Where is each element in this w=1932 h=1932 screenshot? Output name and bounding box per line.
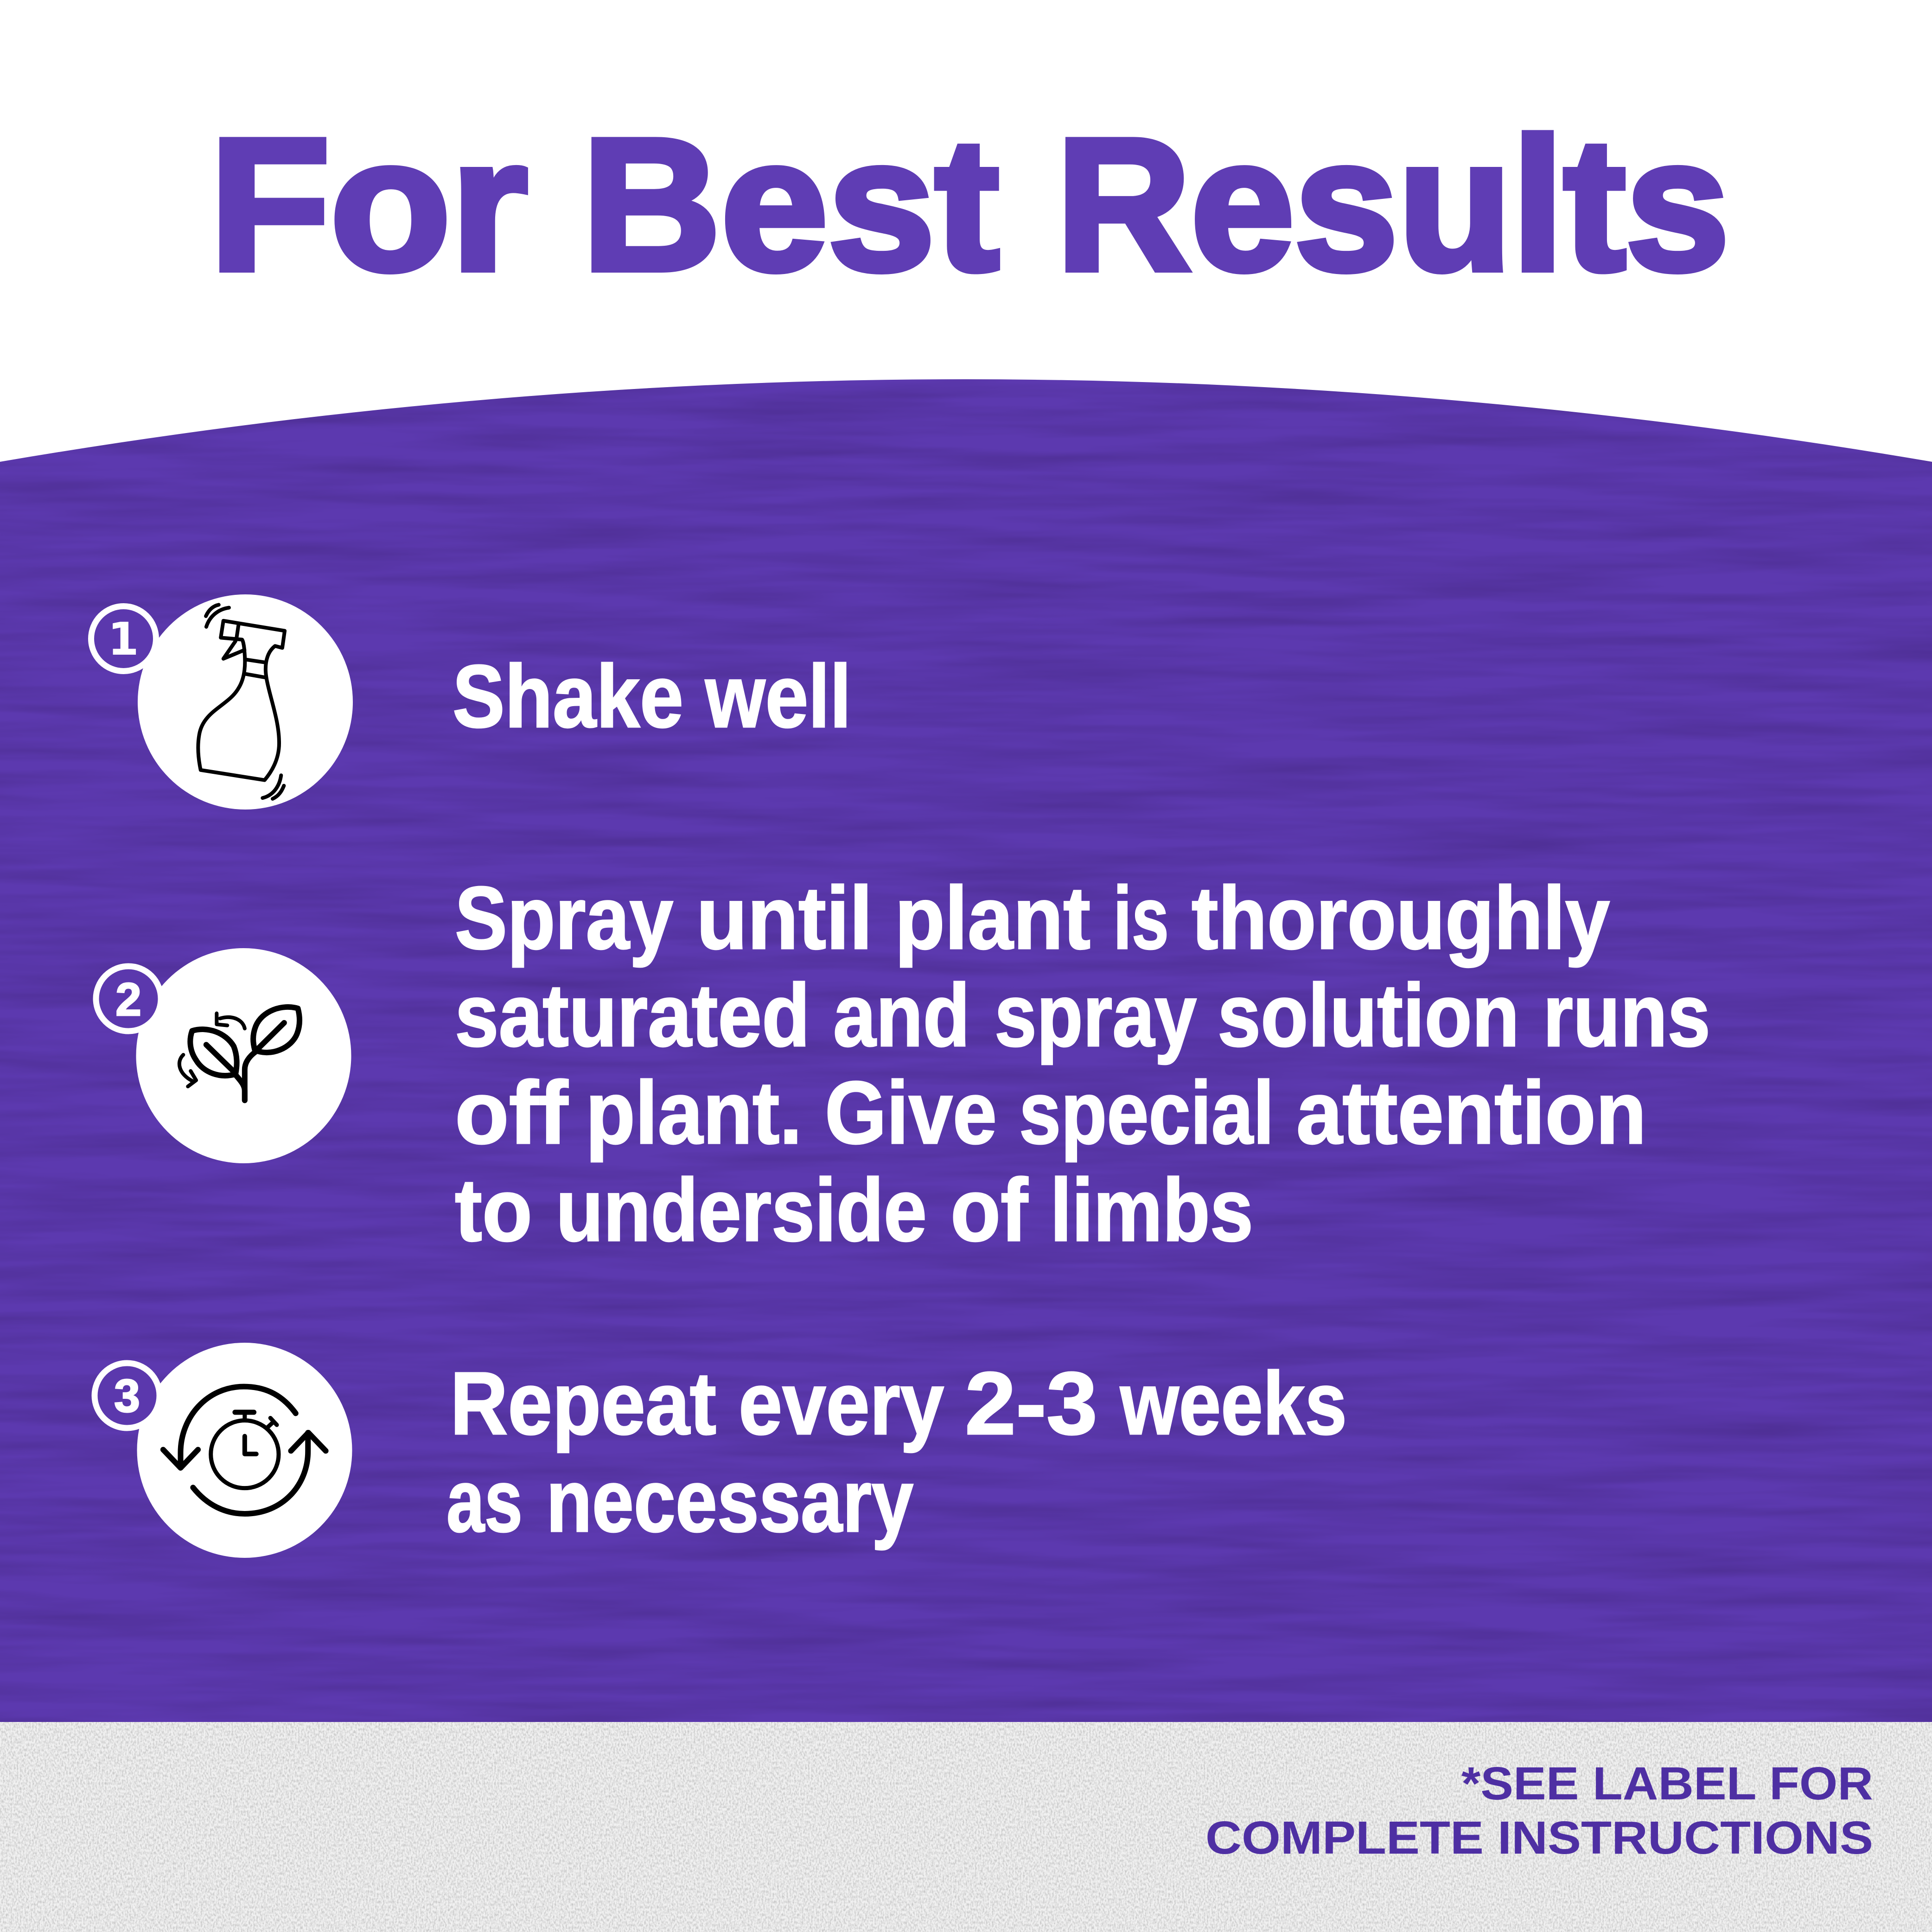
footnote: COMPLETE INSTRUCTIONS — [1205, 1812, 1873, 1864]
step 2 text: saturated — [455, 965, 810, 1065]
step 2 text: is — [1113, 868, 1169, 968]
icon: plant with rotation arrows — [179, 1007, 300, 1100]
step 2 text: plant. — [586, 1063, 802, 1162]
step 2 text: Give — [825, 1063, 997, 1162]
step 1 text — [453, 646, 851, 746]
icon: stopwatch with cycle arrows — [163, 1387, 326, 1514]
step 2 text: Spray — [455, 868, 673, 968]
step 3 text: necessary — [546, 1451, 913, 1550]
step 2 text: underside — [556, 1160, 927, 1260]
step 2 text: off — [455, 1063, 568, 1162]
step 3 text: Repeat — [450, 1353, 716, 1453]
panel: purple wood background — [0, 371, 1932, 1722]
step 3 text: 2-3 — [965, 1353, 1097, 1453]
icon circle 2 — [136, 948, 351, 1163]
badge 3: 3 — [114, 1370, 140, 1422]
step 3 text: as — [446, 1451, 523, 1550]
step 1: shake well — [91, 594, 851, 810]
step 2 text: of — [950, 1160, 1028, 1260]
badge 3 — [95, 1363, 159, 1428]
step 2 text: limbs — [1050, 1160, 1253, 1260]
badge 2: 2 — [115, 974, 141, 1026]
step 2 text — [455, 868, 1710, 1260]
step 2 text: attention — [1296, 1063, 1646, 1162]
step 2: spray plant — [96, 868, 1710, 1260]
step 2 text: solution — [1218, 965, 1519, 1065]
step 2 text: thoroughly — [1192, 868, 1610, 968]
step 3: repeat — [95, 1343, 1347, 1558]
step 2 text: until — [696, 868, 873, 968]
step 3 text: every — [739, 1353, 944, 1453]
title — [210, 99, 1729, 309]
step 3 text: weeks — [1120, 1353, 1347, 1453]
icon: spray bottle — [198, 605, 285, 799]
step 2 text: to — [455, 1160, 532, 1260]
step 3 text — [446, 1353, 1347, 1550]
step 2 text: spray — [995, 965, 1197, 1065]
icon circle 1 — [138, 594, 353, 810]
icon circle 3 — [137, 1343, 352, 1558]
badge 2 — [96, 966, 161, 1031]
step 2 text: and — [833, 965, 970, 1065]
footnote — [1205, 1758, 1873, 1864]
badge 1 — [91, 606, 156, 671]
step 2 text: plant — [895, 868, 1090, 968]
step 2 text: runs — [1543, 965, 1710, 1065]
title: Results — [1056, 99, 1729, 309]
title: Best — [582, 99, 999, 309]
panel: textured footer strip — [0, 1722, 1932, 1932]
step 1 text: well — [705, 646, 851, 746]
step 1 text: Shake — [453, 646, 683, 746]
badge 1: 1 — [108, 613, 139, 665]
title: For — [210, 99, 528, 309]
footnote: *SEE LABEL FOR — [1461, 1758, 1873, 1810]
step 2 text: special — [1019, 1063, 1274, 1162]
